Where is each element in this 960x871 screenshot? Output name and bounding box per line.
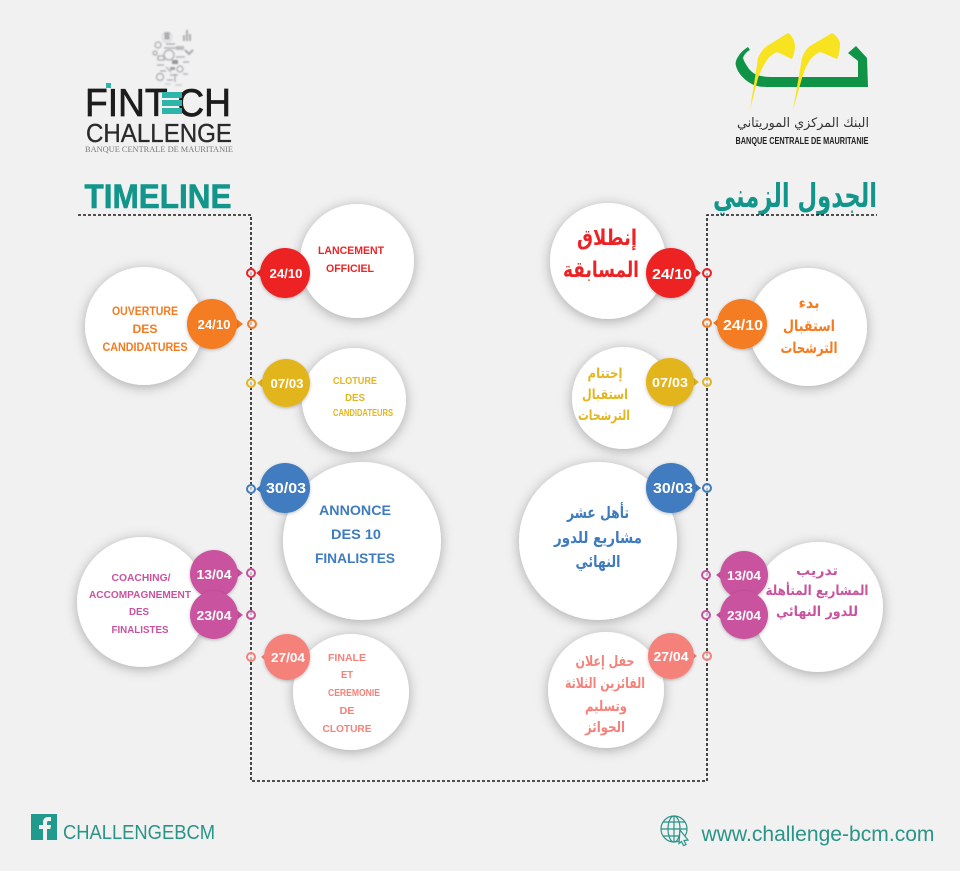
item: finale et ceremonie de cloture: CLOTURE [322, 723, 372, 735]
item: coaching: DES [129, 606, 149, 618]
item: finale et ceremonie de cloture [247, 634, 409, 750]
item: ten projects qualified: مشاريع للدور [553, 528, 642, 547]
item: awards ceremony: الفائزين الثلاثة [565, 676, 645, 692]
item: launch of the competition: المسابقة [563, 258, 639, 283]
item: coaching: 23/04 [196, 608, 232, 623]
Facebook handle: CHALLENGEBCM [63, 822, 215, 844]
FINTECH wordmark: FINT CH [85, 82, 231, 125]
item: lancement officiel: 24/10 [270, 266, 302, 281]
item: ten projects qualified: تأهل عشر [566, 502, 629, 522]
item: training of qualified projects: المشاريع المتأهلة [766, 582, 868, 599]
item: finale et ceremonie de cloture: FINALE [328, 652, 366, 664]
icon: globe with cursor [661, 816, 688, 846]
footer: Facebook [31, 814, 215, 844]
item: ouverture des candidatures [85, 267, 256, 385]
CHALLENGE wordmark: CHALLENGE [86, 118, 232, 148]
item: finale et ceremonie de cloture: DE [340, 705, 354, 717]
item: finale et ceremonie de cloture: 27/04 [271, 650, 306, 665]
item: ten projects qualified [519, 462, 711, 620]
item: coaching [77, 537, 255, 667]
panel: left timeline [77, 204, 441, 750]
item: closing of applications [572, 347, 711, 449]
item: annonce des 10 finalistes: 30/03 [266, 480, 306, 497]
item: annonce des 10 finalistes [247, 462, 441, 620]
item: ten projects qualified: النهائي [576, 552, 620, 572]
item: start of applications [703, 268, 867, 386]
item: ouverture des candidatures: OUVERTURE [112, 306, 178, 318]
website URL: www.challenge-bcm.com [700, 823, 934, 846]
heading: TIMELINE: TIMELINE [84, 178, 232, 216]
Arabic bank name: البنك المركزي الموريتاني [737, 116, 869, 131]
item: cloture des candidateurs: DES [345, 393, 365, 404]
item: coaching: ACCOMPAGNEMENT [89, 589, 192, 601]
logo subtitle: BANQUE CENTRALE DE MAURITANIE [85, 145, 233, 154]
item: coaching: COACHING/ [112, 572, 171, 584]
item: training of qualified projects: للدور النهائي [776, 604, 858, 620]
item: awards ceremony: وتسليم [585, 699, 627, 715]
panel: right timeline [519, 203, 883, 748]
item: annonce des 10 finalistes: ANNONCE [319, 502, 391, 518]
item: ouverture des candidatures: CANDIDATURES [102, 342, 188, 354]
icon: yellow marks [750, 33, 795, 110]
item: launch of the competition: 24/10 [652, 266, 692, 283]
item: closing of applications: استقبال [582, 387, 628, 403]
item: cloture des candidateurs: CLOTURE [333, 376, 377, 387]
item: awards ceremony [548, 632, 711, 748]
item: awards ceremony: الحوائز [584, 720, 625, 736]
icon: green crescent mark [736, 46, 868, 87]
item: cloture des candidateurs: 07/03 [270, 376, 304, 391]
item: training of qualified projects: تدريب [796, 563, 838, 579]
French bank name: BANQUE CENTRALE DE MAURITANIE [736, 136, 869, 147]
item: closing of applications: الترشحات [578, 408, 630, 424]
item: training of qualified projects: 13/04 [727, 568, 762, 583]
item: launch of the competition [550, 203, 711, 319]
icon: Facebook [31, 814, 57, 840]
item: awards ceremony: 27/04 [654, 649, 689, 664]
footer: website [661, 816, 934, 846]
item: annonce des 10 finalistes: FINALISTES [315, 550, 395, 566]
item: closing of applications: 07/03 [652, 375, 688, 390]
item: coaching: FINALISTES [112, 624, 168, 636]
item: annonce des 10 finalistes: DES 10 [331, 526, 381, 542]
item: training of qualified projects: 23/04 [727, 608, 762, 623]
item: awards ceremony: حفل إعلان [576, 654, 634, 670]
item: ouverture des candidatures: DES [132, 324, 158, 336]
item: launch of the competition: إنطلاق [577, 226, 637, 251]
item: start of applications: 24/10 [723, 317, 763, 334]
item: start of applications: بدء [798, 294, 820, 312]
logo: Banque Centrale de Mauritanie [736, 33, 869, 147]
item: finale et ceremonie de cloture: CEREMONIE [328, 687, 380, 699]
item: coaching: 13/04 [196, 567, 232, 582]
item: start of applications: استقبال [783, 317, 835, 335]
item: cloture des candidateurs: CANDIDATEURS [333, 408, 393, 419]
item: finale et ceremonie de cloture: ET [341, 669, 354, 681]
logo: Fintech Challenge [85, 30, 233, 154]
heading: Arabic timeline: الجدول الزمني [713, 176, 877, 216]
item: closing of applications: إختتام [588, 366, 622, 382]
item: ouverture des candidatures: 24/10 [198, 317, 230, 332]
item: training of qualified projects [702, 542, 883, 672]
item: cloture des candidateurs [247, 348, 406, 452]
item: ten projects qualified: 30/03 [653, 480, 693, 497]
item: lancement officiel [247, 204, 414, 318]
item: start of applications: الترشحات [780, 339, 838, 357]
item: lancement officiel: LANCEMENT [318, 245, 384, 257]
icon: light bulb made of small icons [153, 30, 193, 85]
item: lancement officiel: OFFICIEL [326, 263, 374, 275]
